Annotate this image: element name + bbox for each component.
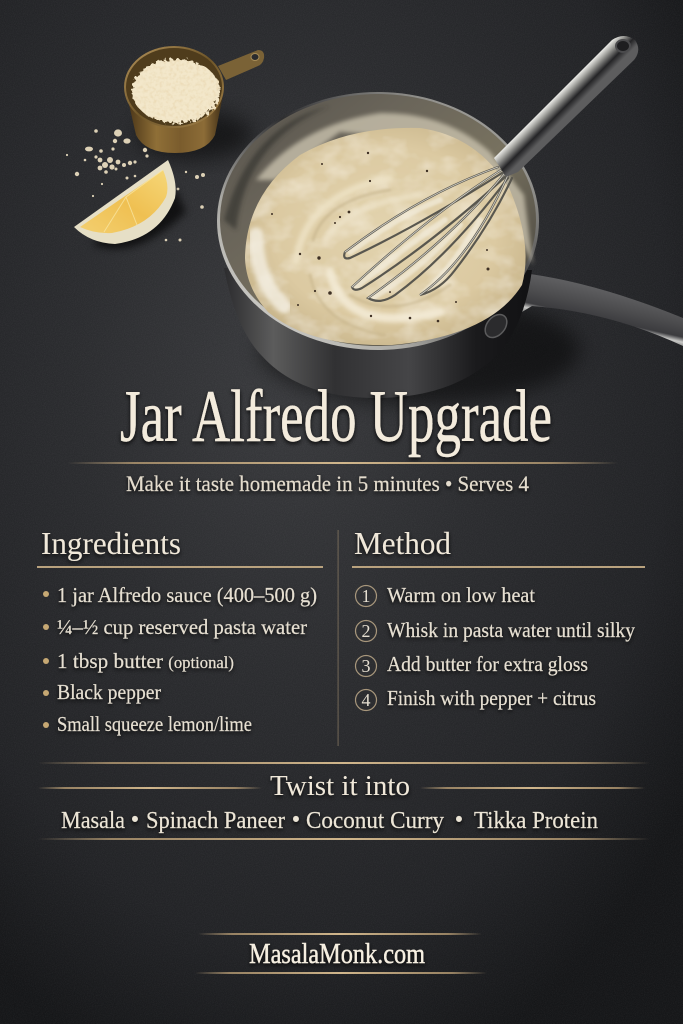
panel: twist it into bbox=[38, 762, 650, 840]
twist options: Tikka Protein bbox=[474, 808, 598, 834]
sauce swirl ridges bbox=[256, 178, 450, 335]
twist options: • bbox=[292, 807, 300, 833]
step numbers: 3 bbox=[362, 656, 370, 676]
step numbers: 2 bbox=[362, 621, 370, 641]
dark shade on pan wall bbox=[224, 106, 330, 230]
alfredo sauce bbox=[245, 128, 526, 345]
photo: scattered cheese crumbs bbox=[66, 129, 205, 242]
pan rim bbox=[217, 92, 539, 350]
ingredient list bbox=[57, 583, 317, 736]
pan interior bbox=[220, 94, 536, 346]
pan handle bbox=[505, 274, 683, 346]
whisk bbox=[344, 36, 638, 301]
twist options: Masala bbox=[61, 808, 125, 834]
step numbers: 1 bbox=[362, 586, 370, 606]
photo: measuring cup of grated cheese bbox=[124, 46, 264, 159]
method steps: Whisk in pasta water until silky bbox=[387, 618, 635, 642]
title rule bbox=[68, 462, 618, 464]
twist heading: Twist it into bbox=[270, 770, 410, 802]
method heading: Method bbox=[354, 525, 451, 561]
sauce streak on pan wall bbox=[256, 113, 533, 265]
black pepper specks bbox=[271, 152, 490, 322]
subtitle: Make it taste homemade in 5 minutes • Serves 4 bbox=[126, 471, 529, 496]
panel: method bbox=[352, 525, 645, 710]
method steps: Finish with pepper + citrus bbox=[387, 686, 596, 710]
ingredient list: ¼–½ cup reserved pasta water bbox=[57, 615, 307, 639]
ingredient list: 1 jar Alfredo sauce (400–500 g) bbox=[57, 583, 317, 607]
column divider bbox=[338, 530, 339, 746]
twist options: Spinach Paneer bbox=[146, 808, 285, 834]
ingredients heading: Ingredients bbox=[41, 525, 181, 561]
pan body bbox=[224, 268, 532, 398]
step number circles bbox=[356, 586, 376, 710]
ingredient list: 1 tbsp butter (optional) bbox=[57, 649, 234, 673]
footer: website: MasalaMonk.com bbox=[249, 939, 425, 970]
ingredient list: Black pepper bbox=[57, 680, 161, 704]
method steps bbox=[387, 583, 635, 710]
twist options bbox=[61, 807, 598, 834]
twist options: Coconut Curry bbox=[306, 808, 444, 834]
method steps: Add butter for extra gloss bbox=[387, 652, 588, 676]
panel: ingredients bbox=[37, 525, 323, 736]
twist options: • bbox=[131, 807, 139, 833]
whisk handle bbox=[494, 36, 638, 177]
ingredient list: Small squeeze lemon/lime bbox=[57, 712, 252, 736]
rivet bbox=[481, 310, 511, 342]
step numbers: 4 bbox=[362, 690, 370, 710]
photo: saucepan with alfredo sauce bbox=[217, 36, 683, 404]
photo: lemon wedge bbox=[74, 160, 186, 249]
step numbers bbox=[362, 586, 370, 710]
twist options: • bbox=[455, 807, 463, 833]
ingredient bullets bbox=[43, 591, 49, 728]
method steps: Warm on low heat bbox=[387, 583, 535, 607]
